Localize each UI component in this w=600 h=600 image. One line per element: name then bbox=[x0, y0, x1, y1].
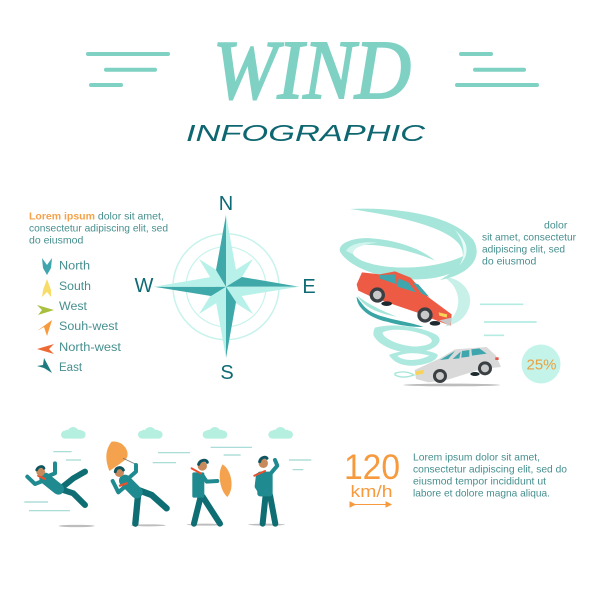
text block: compass intro: do eiusmod bbox=[29, 234, 83, 246]
text block: speed description: labore et dolore magna aliqua. bbox=[413, 488, 550, 500]
legend item: North-west: North-west bbox=[59, 342, 122, 354]
compass rose bbox=[135, 193, 316, 384]
person standing bbox=[254, 457, 277, 524]
white car bbox=[403, 347, 501, 386]
wind lines: people bbox=[24, 447, 311, 511]
text block: speed description: consectetur adipiscing elit, sed do bbox=[413, 464, 567, 476]
compass letter E: E bbox=[302, 276, 316, 298]
speed readout: 120 km/h: 120 bbox=[344, 448, 400, 487]
text block: speed description: Lorem ipsum dolor sit amet, bbox=[413, 452, 540, 464]
text block: tornado: do eiusmod bbox=[482, 256, 536, 268]
person holding umbrella bbox=[192, 460, 232, 524]
badge: 25%: 25% bbox=[526, 356, 557, 374]
text block: tornado: dolor bbox=[544, 220, 568, 232]
text block: tornado: adipiscing elit, sed bbox=[482, 244, 565, 256]
text block: tornado: sit amet, consectetur bbox=[482, 232, 576, 244]
legend item: South-west: Souh-west bbox=[59, 321, 119, 333]
wind lines: tornado bbox=[480, 304, 537, 335]
text block: tornado bbox=[482, 220, 576, 268]
red car bbox=[357, 271, 452, 326]
person falling bbox=[27, 463, 85, 505]
people in wind bbox=[24, 427, 311, 527]
title: WIND: WIND bbox=[213, 24, 411, 117]
person with blown umbrella bbox=[106, 442, 167, 524]
text block: compass intro bbox=[29, 210, 168, 246]
text block: speed description bbox=[413, 452, 567, 500]
compass letter N: N bbox=[219, 193, 233, 215]
text block: compass intro: Lorem ipsum dolor sit amet, bbox=[29, 210, 164, 222]
speed readout: 120 km/h bbox=[344, 448, 400, 507]
badge: 25% bbox=[522, 344, 560, 384]
legend: wind directions bbox=[37, 258, 122, 374]
speed readout: 120 km/h: km/h bbox=[350, 482, 392, 501]
wind lines: title right bbox=[457, 54, 537, 85]
text block: compass intro: consectetur adipiscing elit, sed bbox=[29, 222, 168, 234]
shadows bbox=[59, 524, 285, 527]
text block: speed description: eiusmod tempor incididunt ut bbox=[413, 476, 546, 488]
legend item: West: West bbox=[59, 301, 88, 313]
arrow: speed bbox=[350, 502, 391, 507]
tornado funnel bbox=[340, 209, 477, 377]
compass letter S: S bbox=[220, 362, 234, 384]
compass letter W: W bbox=[135, 275, 154, 297]
wind lines: title left bbox=[88, 54, 168, 85]
clouds bbox=[61, 427, 293, 439]
legend item: East: East bbox=[59, 362, 83, 374]
tornado with cars bbox=[340, 209, 537, 386]
legend item: North: North bbox=[59, 260, 90, 272]
legend item: South: South bbox=[59, 281, 91, 293]
subtitle: INFOGRAPHIC: INFOGRAPHIC bbox=[186, 120, 426, 146]
